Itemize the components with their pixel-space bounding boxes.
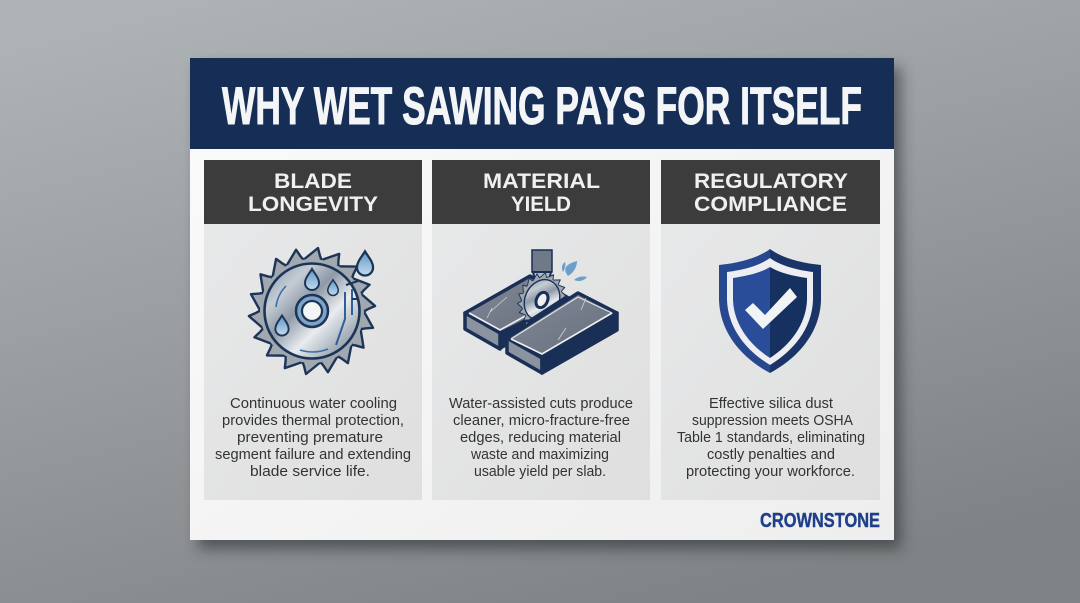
icon: saw blade with water drops <box>248 248 376 374</box>
body text: material yield: waste and maximizing <box>470 447 609 463</box>
heading: regulatory compliance: REGULATORY <box>694 170 848 193</box>
panel: material yield <box>432 160 650 500</box>
card shadow <box>198 67 901 549</box>
body text: blade longevity: preventing premature <box>237 430 383 446</box>
heading: material yield: YIELD <box>511 193 571 216</box>
icon: shield with check mark <box>719 249 821 373</box>
body text: blade longevity: provides thermal protection, <box>222 413 404 429</box>
body text: regulatory compliance: Table 1 standards, eliminating <box>677 430 865 446</box>
panel: blade longevity <box>204 160 422 500</box>
heading: blade longevity: BLADE <box>274 170 352 193</box>
body text: material yield <box>449 396 633 480</box>
body text: material yield: usable yield per slab. <box>474 464 606 480</box>
heading: blade longevity: LONGEVITY <box>248 193 378 216</box>
body text: regulatory compliance: suppression meets OSHA <box>692 413 853 429</box>
body text: blade longevity <box>215 396 411 480</box>
card <box>190 58 894 540</box>
icon: blade cutting stone slabs <box>465 250 617 373</box>
body text: regulatory compliance <box>677 396 865 480</box>
body text: material yield: Water-assisted cuts produce <box>449 396 633 412</box>
title banner <box>190 58 894 149</box>
body text: material yield: cleaner, micro-fracture-free <box>453 413 630 429</box>
body text: material yield: edges, reducing material <box>460 430 621 446</box>
body text: blade longevity: blade service life. <box>250 464 370 480</box>
heading: material yield <box>432 160 650 224</box>
heading: regulatory compliance: COMPLIANCE <box>694 193 847 216</box>
heading: regulatory compliance <box>661 160 880 224</box>
shaft <box>532 250 552 272</box>
body text: regulatory compliance: costly penalties and <box>707 447 835 463</box>
heading: material yield: MATERIAL <box>483 170 600 193</box>
brand logo: CROWNSTONE <box>760 510 880 532</box>
heading: blade longevity <box>204 160 422 224</box>
panel: regulatory compliance <box>661 160 880 500</box>
body text: blade longevity: Continuous water cooling <box>230 396 397 412</box>
body text: blade longevity: segment failure and extending <box>215 447 411 463</box>
body text: regulatory compliance: Effective silica dust <box>709 396 833 412</box>
body text: regulatory compliance: protecting your workforce. <box>686 464 855 480</box>
